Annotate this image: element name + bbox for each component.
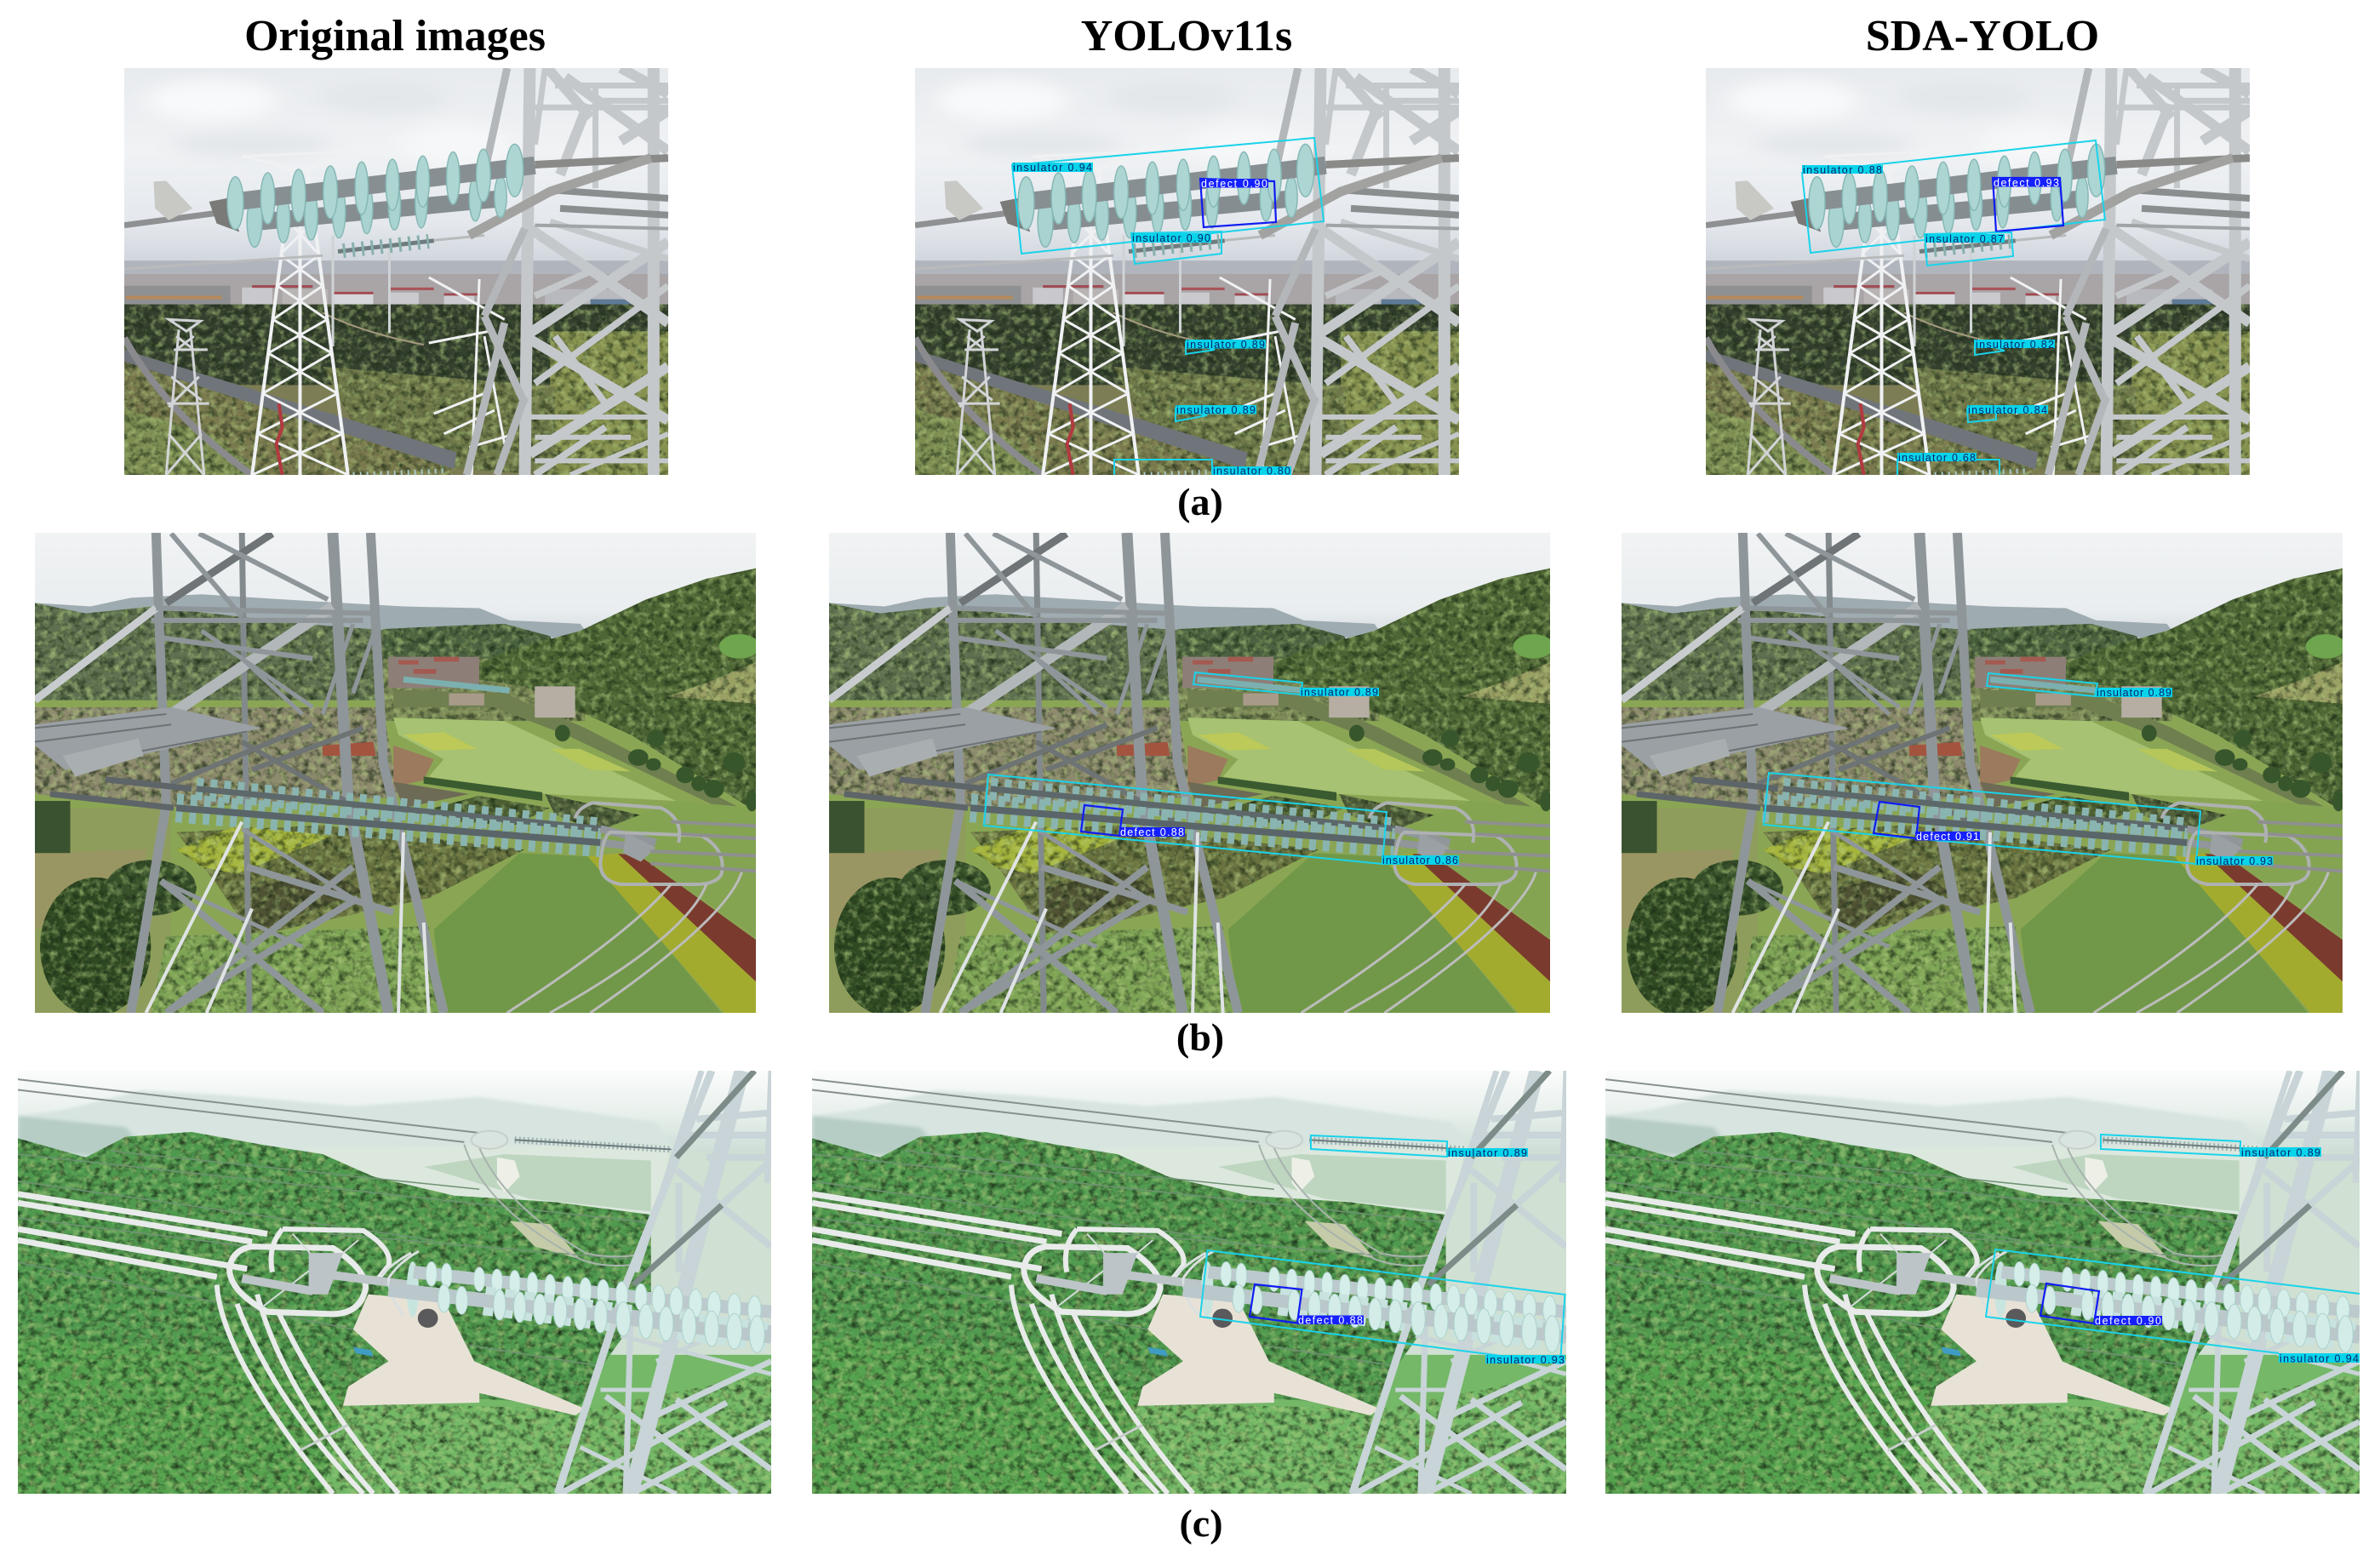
- detection: insulator 0.94: [1986, 1249, 2360, 1365]
- detection: insulator 0.90: [1131, 232, 1221, 264]
- detection: insulator 0.88: insulator 0.88: [1803, 164, 1882, 176]
- caption: (b): (b): [1176, 1015, 1224, 1059]
- detection: defect 0.88: [1081, 805, 1185, 838]
- detection: insulator 0.89: [1311, 1135, 1528, 1159]
- detection: insulator 0.94: [1012, 138, 1324, 254]
- detection: insulator 0.87: insulator 0.87: [1925, 233, 2004, 245]
- detection: insulator 0.89: [1193, 672, 1379, 698]
- detection: insulator 0.89: [2101, 1135, 2321, 1159]
- panel: row a YOLOv11s detections: [915, 68, 1459, 477]
- heading: YOLOv11s: YOLOv11s: [1081, 12, 1292, 60]
- detection: defect 0.90: [1200, 178, 1276, 227]
- detection: insulator 0.89: [1987, 673, 2172, 699]
- detection: insulator 0.84: insulator 0.84: [1968, 404, 2047, 416]
- detection: insulator 0.89 lower: insulator 0.89: [1176, 404, 1256, 416]
- detection: insulator 0.93: [1764, 773, 2273, 867]
- detection: insulator 0.94: insulator 0.94: [1013, 162, 1092, 174]
- detection: insulator 0.84: [1967, 404, 2048, 422]
- detection: insulator 0.89: insulator 0.89: [2241, 1147, 2320, 1159]
- detection: insulator 0.86: insulator 0.86: [1382, 855, 1458, 866]
- panel: row c SDA-YOLO detections: [1605, 1071, 2360, 1494]
- detection: insulator 0.93: insulator 0.93: [2196, 855, 2273, 867]
- detection: defect 0.93: defect 0.93: [1994, 177, 2059, 189]
- heading: SDA-YOLO: SDA-YOLO: [1866, 12, 2099, 60]
- detection: insulator 0.93: insulator 0.93: [1486, 1354, 1565, 1366]
- panel: row c original image: [18, 1071, 771, 1494]
- detection: insulator 0.89: insulator 0.89: [2097, 687, 2171, 699]
- detection: defect 0.93: [1993, 177, 2063, 232]
- detection: insulator 0.89: insulator 0.89: [1448, 1147, 1527, 1159]
- detection: insulator 0.89: insulator 0.89: [1301, 686, 1378, 698]
- detection: insulator 0.89: insulator 0.89: [1187, 339, 1265, 351]
- detection: defect 0.91: [1874, 802, 1980, 843]
- detection: defect 0.91: defect 0.91: [1916, 831, 1979, 843]
- panel: row a original image: [124, 68, 668, 475]
- detection: insulator 0.93: [1200, 1250, 1565, 1366]
- detection: insulator 0.82: insulator 0.82: [1976, 339, 2054, 351]
- detection: defect 0.90: defect 0.90: [2095, 1315, 2161, 1327]
- detection: insulator 0.88: [1802, 140, 2105, 253]
- caption: (c): (c): [1179, 1501, 1223, 1545]
- panel: row b original image: [35, 533, 759, 1016]
- detection: insulator 0.68: [1897, 452, 2000, 475]
- detection: insulator 0.90: insulator 0.90: [1132, 232, 1210, 244]
- panel: row b SDA-YOLO detections: [1622, 533, 2346, 1016]
- caption: (a): (a): [1177, 480, 1223, 523]
- detection: defect 0.90: [2040, 1283, 2162, 1327]
- heading: Original images: Original images: [244, 12, 546, 60]
- detection: insulator 0.68: insulator 0.68: [1898, 452, 1976, 464]
- detection: insulator 0.80: insulator 0.80: [1213, 465, 1290, 477]
- detection: insulator 0.94: insulator 0.94: [2280, 1353, 2359, 1365]
- detection: insulator 0.80: [1114, 460, 1291, 477]
- panel: row a SDA-YOLO detections: [1706, 68, 2250, 475]
- detection: insulator 0.87: [1925, 232, 2013, 266]
- detection: defect 0.90: defect 0.90: [1201, 178, 1267, 190]
- detection: insulator 0.89 lower: [1176, 404, 1256, 421]
- detection: defect 0.88: defect 0.88: [1298, 1314, 1363, 1326]
- detection: defect 0.88: [1250, 1284, 1364, 1326]
- panel: row b YOLOv11s detections: [829, 533, 1553, 1016]
- detection: defect 0.88: defect 0.88: [1120, 826, 1184, 838]
- panel: row c YOLOv11s detections: [812, 1071, 1566, 1494]
- detection: insulator 0.86: [984, 775, 1459, 866]
